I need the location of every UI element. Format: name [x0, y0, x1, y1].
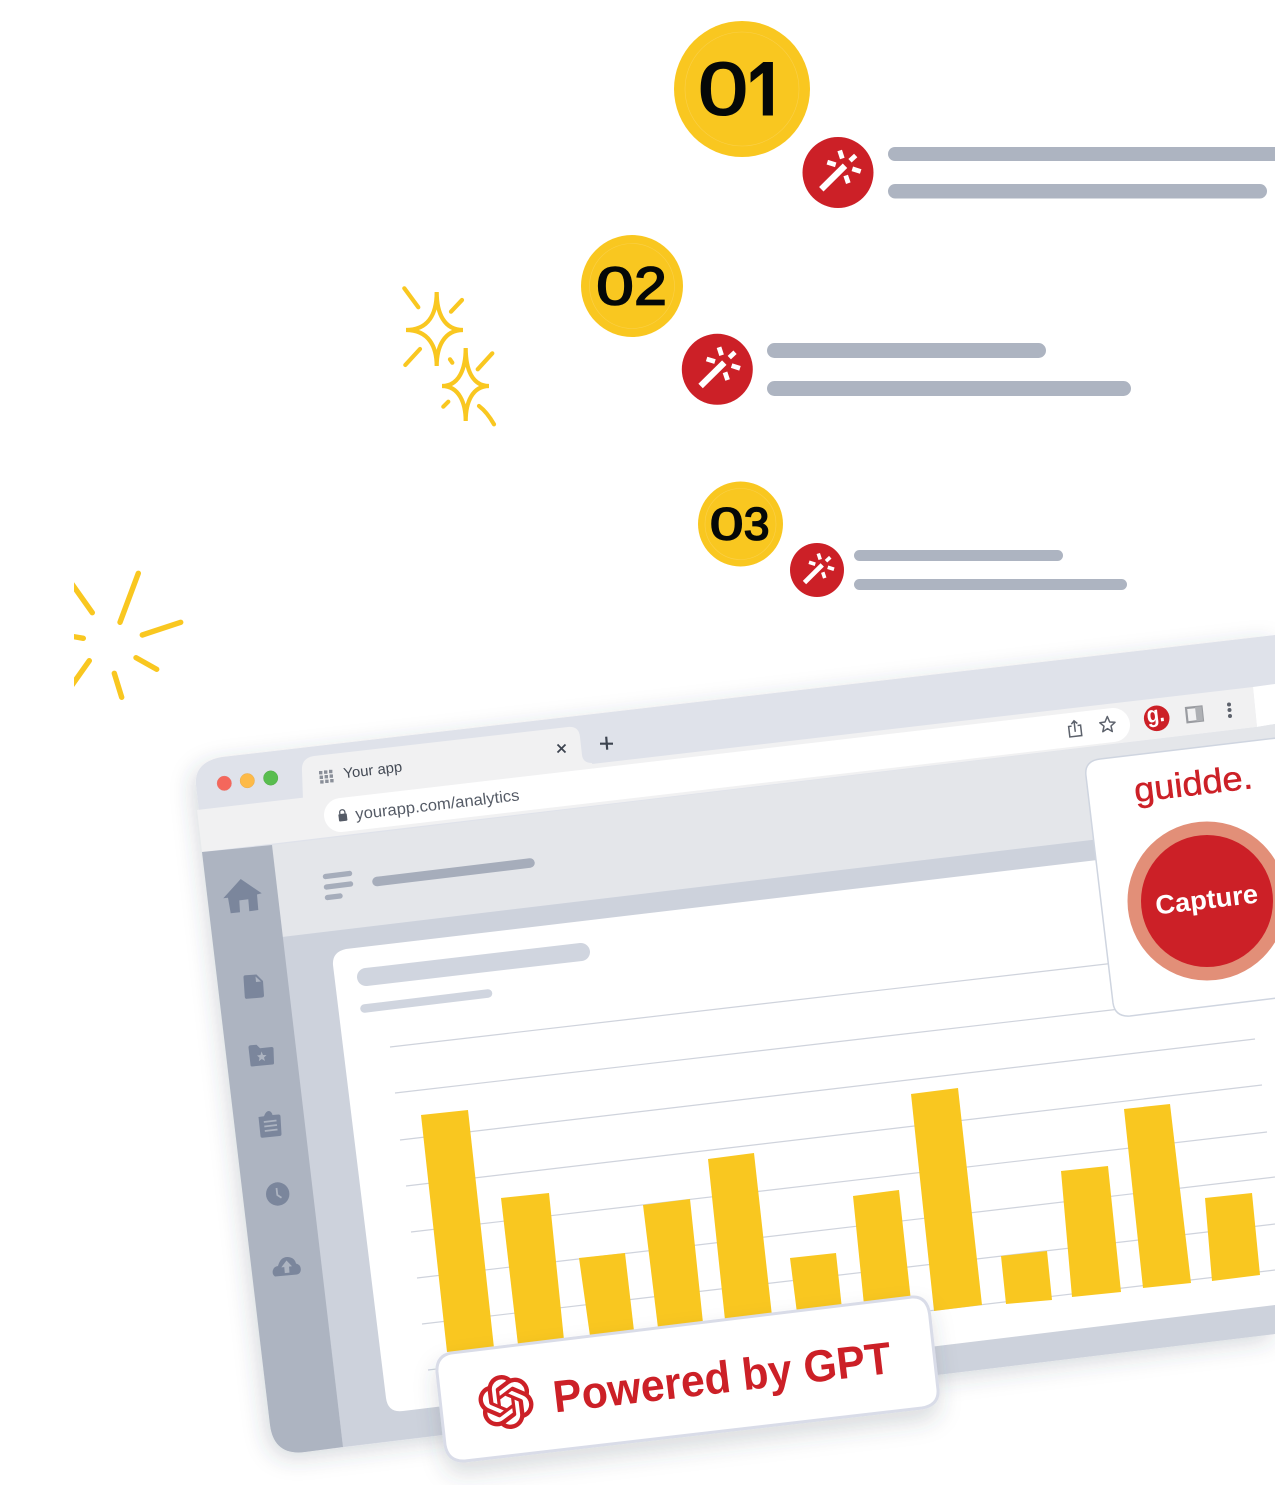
capture button: Capture: [1154, 879, 1259, 920]
icon: clipboard: [258, 1111, 282, 1138]
tab title: Your app: [343, 759, 403, 782]
step 01 text placeholder lines: [888, 147, 1275, 198]
browser tab: [302, 727, 600, 800]
sidebar: [202, 845, 343, 1452]
icon: guidde extension: g.: [1145, 700, 1166, 728]
step 01 number badge: 1: [746, 41, 787, 146]
capture button: [1128, 822, 1275, 980]
content background: [282, 818, 1275, 1447]
step 03 number badge: 0: [710, 500, 743, 550]
step 03: [698, 482, 1127, 597]
toolbar: [197, 684, 1275, 852]
icon: burst rays: [70, 573, 181, 697]
step 03 number badge: [698, 482, 783, 566]
icon: starred folder: [248, 1045, 274, 1066]
bars: [421, 1088, 1260, 1352]
guidde capture panel: [1086, 737, 1275, 1016]
window frame: [196, 635, 1275, 1452]
icon: lock: [338, 809, 348, 822]
guidde logo: guidde.: [1132, 758, 1255, 810]
icon: menu dots: [1227, 702, 1232, 718]
icon: side panel: [1186, 706, 1203, 722]
icon: document: [243, 974, 264, 999]
browser window: [196, 635, 1275, 1461]
card title placeholder: [366, 952, 581, 977]
step 03 number badge: 3: [744, 499, 769, 549]
badge text: Powered by GPT: [550, 1332, 894, 1422]
step 01 number badge: [674, 21, 810, 157]
app header: [272, 724, 1275, 1447]
step 02 number badge: 0: [596, 256, 634, 316]
url text: yourapp.com/analytics: [354, 787, 520, 823]
powered by GPT badge: [437, 1297, 938, 1461]
card subtitle placeholder: [364, 994, 488, 1008]
step 01 number badge: 0: [698, 48, 748, 131]
traffic lights: [217, 771, 278, 790]
header title placeholder: [377, 863, 530, 882]
step 03 text placeholder lines: [854, 550, 1127, 590]
step 02 text placeholder lines: [767, 343, 1131, 396]
address bar: [341, 725, 1113, 815]
icon: share: [1068, 720, 1082, 737]
chart grid lines: [390, 963, 1275, 1370]
icon: magic wand 3: [790, 543, 844, 597]
icon: home: [223, 879, 262, 913]
icon: OpenAI logo: [476, 1372, 536, 1432]
step 02 number badge: 2: [634, 255, 667, 316]
icon: magic wand 1: [802, 137, 874, 208]
icon: cloud upload: [273, 1257, 301, 1276]
tab close icon: [558, 744, 566, 752]
icon: clock: [266, 1182, 289, 1206]
bar chart: [390, 963, 1275, 1370]
new tab plus: [600, 737, 613, 750]
step 01: [674, 21, 1275, 208]
icon: hamburger: [326, 874, 350, 898]
analytics card: [333, 839, 1275, 1411]
icon: magic wand 2: [682, 334, 753, 405]
icon: sparkles: [404, 288, 494, 424]
step 02 number badge: [581, 235, 683, 337]
icon: star: [1100, 716, 1115, 732]
step 02: [581, 235, 1131, 405]
tab grid icon: [319, 770, 334, 784]
